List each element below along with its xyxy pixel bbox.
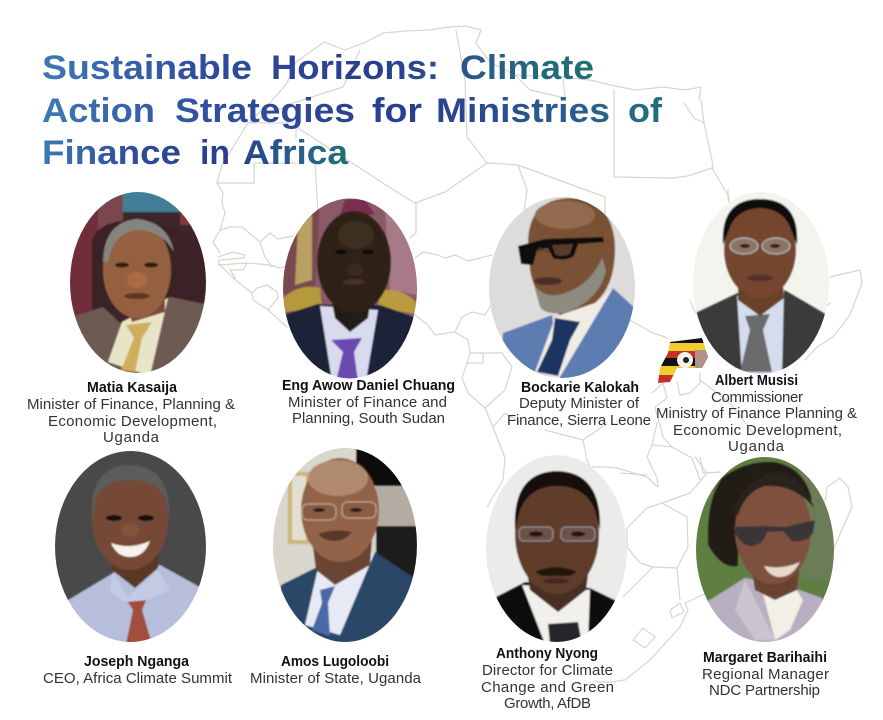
portrait: Matia Kasaija <box>68 190 210 376</box>
caption: Awow Daniel Chuang: Eng Awow Daniel Chuang <box>282 378 455 394</box>
caption: Matia Kasaija: Economic Development, <box>48 413 217 430</box>
caption: Joseph Nganga: CEO, Africa Climate Summit <box>43 670 233 687</box>
title <box>42 49 663 172</box>
title: Strategies <box>175 92 355 130</box>
title: Finance <box>42 134 181 172</box>
caption: Albert Musisi: Commissioner <box>711 389 803 406</box>
caption: Anthony Nyong <box>481 646 614 712</box>
panel: Anthony Nyong <box>481 453 629 712</box>
caption: Bockarie Kalokah: Bockarie Kalokah <box>521 380 639 396</box>
caption: Matia Kasaija <box>27 380 235 446</box>
icon: Uganda flag map <box>658 338 708 383</box>
caption: Joseph Nganga: Joseph Nganga <box>84 654 190 670</box>
caption: Margaret Barihaihi: Regional Manager <box>702 666 829 683</box>
caption: Albert Musisi: Albert Musisi <box>715 373 798 389</box>
portrait: Margaret Barihaihi <box>694 455 836 645</box>
portrait: Anthony Nyong <box>484 453 629 644</box>
panel: Joseph Nganga <box>43 449 233 687</box>
caption: Albert Musisi: Ministry of Finance Planning & <box>656 405 857 422</box>
caption: Bockarie Kalokah: Finance, Sierra Leone <box>507 412 651 429</box>
title: in <box>200 134 230 172</box>
portrait: Joseph Nganga <box>53 449 208 644</box>
caption: Anthony Nyong: Change and Green <box>481 679 614 696</box>
caption: Margaret Barihaihi: Margaret Barihaihi <box>703 650 827 666</box>
caption: Anthony Nyong: Anthony Nyong <box>496 646 598 662</box>
panel: Eng Awow Daniel Chuang <box>281 197 455 427</box>
caption: Amos Lugoloobi: Minister of State, Uganda <box>250 670 422 687</box>
title: Sustainable <box>42 49 252 87</box>
panel: Amos Lugoloobi <box>250 446 422 687</box>
caption: Albert Musisi: Economic Development, <box>673 422 842 439</box>
caption: Bockarie Kalokah: Deputy Minister of <box>519 395 640 412</box>
caption: Margaret Barihaihi <box>702 650 829 699</box>
background map of Africa <box>213 26 862 682</box>
caption: Albert Musisi: Uganda <box>728 438 785 455</box>
portrait: Albert Musisi <box>691 190 831 376</box>
title: Africa <box>243 134 349 172</box>
caption: Anthony Nyong: Growth, AfDB <box>504 695 591 712</box>
title: Climate <box>460 49 594 87</box>
caption: Awow Daniel Chuang: Minister of Finance and <box>288 394 447 411</box>
caption: Anthony Nyong: Director for Climate <box>482 662 613 679</box>
caption: Matia Kasaija: Minister of Finance, Planning & <box>27 396 235 413</box>
title: Ministries <box>436 92 610 130</box>
caption: Margaret Barihaihi: NDC Partnership <box>709 682 820 699</box>
caption: Matia Kasaija: Uganda <box>103 429 160 446</box>
panel: Margaret Barihaihi <box>694 455 836 699</box>
panel: Bockarie Kalokah <box>487 195 651 429</box>
caption: Awow Daniel Chuang: Planning, South Sudan <box>292 410 445 427</box>
panel: Albert Musisi <box>656 190 857 455</box>
caption: Joseph Nganga <box>43 654 233 687</box>
caption: Amos Lugoloobi <box>250 654 422 687</box>
panel: Matia Kasaija <box>27 190 235 446</box>
portrait: Awow Daniel Chuang <box>281 197 419 381</box>
caption: Awow Daniel Chuang <box>282 378 455 427</box>
portrait: Bockarie Kalokah <box>487 195 637 380</box>
caption: Matia Kasaija: Matia Kasaija <box>87 380 178 396</box>
portrait: Amos Lugoloobi <box>271 446 419 644</box>
title: for <box>372 92 422 130</box>
caption: Albert Musisi <box>656 373 857 455</box>
title: of <box>628 92 663 130</box>
title: Action <box>42 92 155 130</box>
caption: Amos Lugoloobi: Amos Lugoloobi <box>281 654 389 670</box>
title: Horizons: <box>271 49 439 87</box>
caption: Bockarie Kalokah <box>507 380 651 429</box>
